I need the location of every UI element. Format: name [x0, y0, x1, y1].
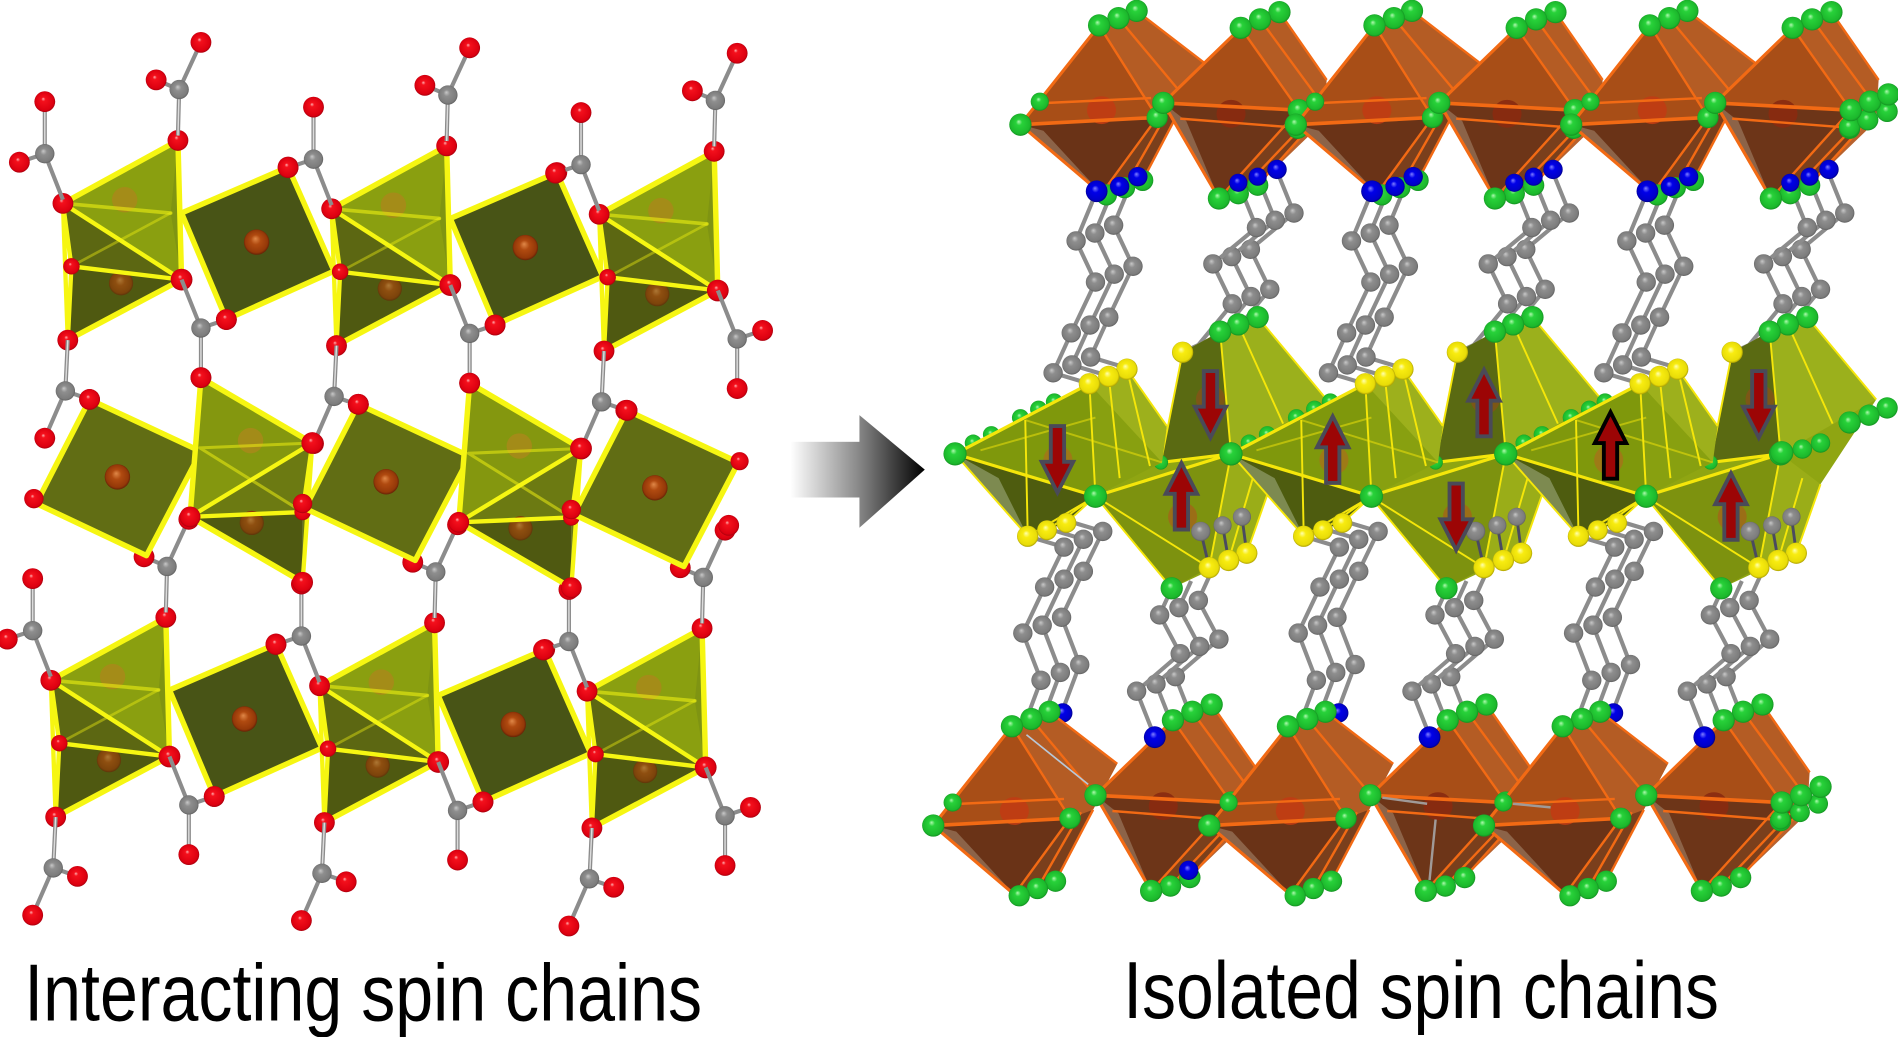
- arrow: spin up 7: [1595, 412, 1626, 479]
- arrow: spin up 5: [1468, 370, 1500, 436]
- arrow: transformation: [790, 415, 925, 528]
- bottom orange octahedra row: [922, 693, 1832, 906]
- spin arrows: [1042, 370, 1775, 550]
- arrow: spin down 6: [1440, 484, 1472, 550]
- top orange octahedra row: [1009, 0, 1898, 210]
- arrow: spin up 9: [1715, 473, 1747, 540]
- caption: interacting spin chains: Interacting spin chains: [24, 948, 702, 1037]
- arrow: spin down 8: [1743, 371, 1775, 438]
- panel: interacting spin chains structure: [0, 32, 773, 936]
- row 3 of polyhedra and carboxylate linkers: [0, 509, 761, 936]
- arrow: spin down 2: [1195, 371, 1226, 438]
- arrow: spin down 1: [1042, 426, 1073, 493]
- row 1 of polyhedra and carboxylate linkers: [9, 32, 773, 459]
- organic ligand pillars: [1013, 168, 1854, 737]
- middle yellow-green spin chain polyhedra: [943, 306, 1898, 599]
- nitrogen atoms under the top row: [1086, 160, 1839, 202]
- arrow: spin up 3: [1166, 463, 1197, 530]
- row 2 of polyhedra: [24, 367, 749, 598]
- arrow: spin up 4: [1317, 416, 1348, 483]
- caption: isolated spin chains: Isolated spin chains: [1123, 946, 1719, 1036]
- panel: isolated spin chains structure: [922, 0, 1898, 906]
